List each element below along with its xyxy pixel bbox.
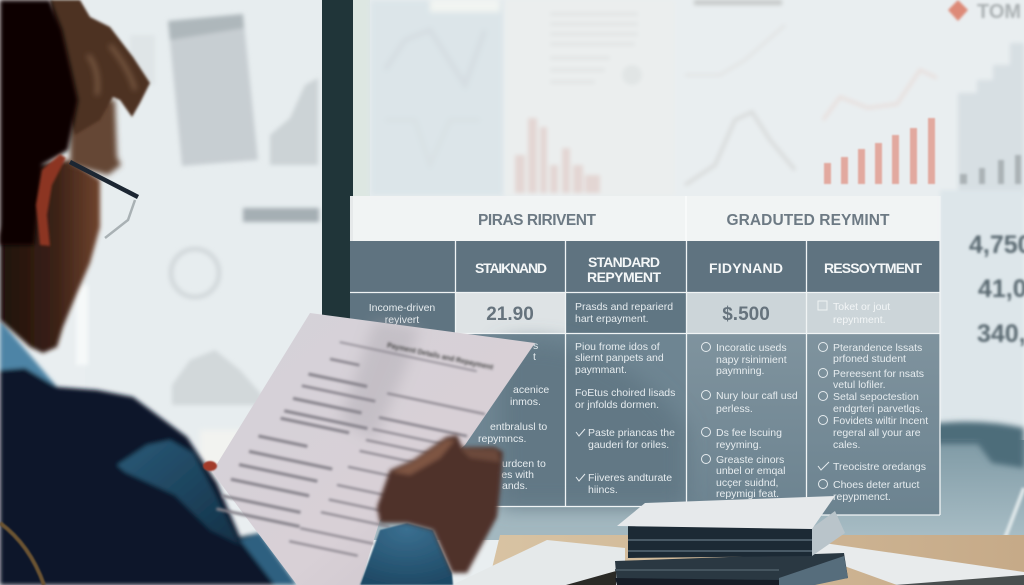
column 4 text — [702, 342, 798, 500]
column 2 text: repymncs. — [478, 433, 526, 445]
title band — [350, 196, 940, 241]
person: forehead — [70, 100, 121, 175]
left wall charts, blurred — [130, 14, 319, 405]
column 4 text: reyyming. — [716, 439, 762, 451]
row: income-driven: reyivert — [385, 314, 419, 326]
row: income-driven: 21.90 — [486, 304, 534, 325]
row: income-driven: hart erpayment. — [575, 313, 649, 325]
column headers: FIDYNAND — [709, 260, 783, 276]
column 3 text: FoEtus choired lisads — [575, 387, 675, 399]
lower wall band — [350, 422, 1024, 540]
row: income-driven: Income-driven — [369, 302, 435, 314]
row: income-driven: $.500 — [722, 304, 770, 325]
column 2 text: acenice — [513, 384, 549, 396]
column 4 text: ucçer suidnd, — [716, 477, 778, 489]
row: income-driven — [369, 301, 890, 326]
middle wall charts, blurred — [505, 0, 1024, 196]
table body — [350, 241, 940, 515]
column headers: RESSOYTMENT — [824, 260, 922, 276]
column 2 text: t — [533, 351, 536, 363]
column 2 text — [470, 340, 549, 492]
column headers: REPYMENT — [587, 269, 661, 285]
held document — [212, 313, 535, 585]
column 3 text — [575, 341, 675, 496]
column 5 text: Pereesent for nsats — [833, 368, 924, 380]
column headers: STANDARD — [588, 254, 660, 270]
gray bar chart — [960, 155, 1021, 184]
window pillar — [322, 0, 353, 322]
title band: GRADUTED REYMINT — [726, 212, 890, 229]
column 2 text: entbralusl to — [490, 421, 547, 433]
title band: PIRAS RIRIVENT — [478, 212, 597, 229]
column 5 text: Treocistre oredangs — [833, 461, 926, 473]
sleeve — [360, 523, 453, 585]
column 2 text: tr es with — [492, 469, 534, 481]
column 5 text: Fovidets wiltir Incent — [833, 415, 928, 427]
column 4 text: Nury lour cafl usd — [716, 390, 798, 402]
column 3 text: Paste priancas the — [588, 427, 675, 439]
row: income-driven: repynment. — [833, 314, 886, 326]
column 5 text: vetul lofiler. — [833, 379, 886, 391]
column 2 text: inmos. — [510, 396, 541, 408]
person: brown curly hair — [50, 0, 150, 135]
person: shirt and shoulder — [0, 320, 297, 585]
column 2 text: s — [533, 340, 538, 352]
column 3 text: gauderi for oriles. — [588, 439, 669, 451]
person: glasses — [70, 162, 138, 238]
red bar chart — [824, 118, 935, 184]
column 5 text: regeral all your are — [833, 427, 921, 439]
left chair edge — [0, 523, 44, 585]
column headers — [475, 254, 922, 285]
column 5 text: cales. — [833, 439, 860, 451]
column 4 text: Greaste cinors — [716, 454, 784, 466]
right wall charts, blurred — [370, 0, 504, 196]
column 4 text: perless. — [716, 403, 753, 415]
logo: TOM — [948, 0, 1021, 23]
column 2 text: urdcen to — [502, 458, 546, 470]
hair curl highlights — [88, 45, 135, 95]
hand holding document — [377, 435, 503, 573]
column 3 text: or jnfolds dormen. — [575, 399, 659, 411]
column 4 text: Ds fee lscuing — [716, 427, 782, 439]
row: income-driven: Toket or jout — [833, 301, 890, 313]
person: ear — [36, 154, 66, 246]
column 4 text: Incoratic useds — [716, 342, 787, 354]
grid lines — [350, 196, 940, 515]
column 5 text — [818, 342, 928, 503]
column 5 text: prfoned student — [833, 353, 906, 365]
logo: TOM: TOM — [977, 1, 1021, 23]
stack of papers — [615, 496, 848, 585]
column 3 text: sliernt panpets and — [575, 352, 664, 364]
right side panel and numbers — [940, 190, 1024, 435]
column 4 text: unbel or emqal — [716, 465, 785, 477]
row: income-driven: Prasds and reparierd — [575, 301, 673, 313]
column 5 text: repypmenct. — [833, 491, 891, 503]
person: dark hair — [0, 0, 78, 245]
column 3 text: Fiiveres andturate — [588, 472, 672, 484]
column 4 text: repymigi feat. — [716, 488, 779, 500]
desk — [488, 535, 1024, 585]
column 5 text: Setal sepoctestion — [833, 391, 919, 403]
loose papers on desk — [452, 540, 1024, 585]
column 3 text: paymmant. — [575, 364, 627, 376]
document text lines: Payment Details and Repayment — [386, 342, 494, 372]
comparison table — [350, 196, 940, 515]
document text lines — [213, 315, 495, 576]
column 3 text: Piou frome idos of — [575, 341, 660, 353]
column 5 text: endgrteri parvetlqs. — [833, 403, 923, 415]
column headers: STAIKNAND — [475, 260, 547, 276]
column 4 text: paymning. — [716, 365, 764, 377]
column 2 text: ands. — [502, 480, 528, 492]
column 4 text: napy rsinimient — [716, 354, 787, 366]
column 3 text: hiincs. — [588, 484, 618, 496]
column 5 text: Choes deter artuct — [833, 479, 919, 491]
far hand — [203, 461, 217, 471]
column 5 text: Pterandence lssats — [833, 342, 922, 354]
person: neck and face in shadow — [0, 160, 100, 353]
